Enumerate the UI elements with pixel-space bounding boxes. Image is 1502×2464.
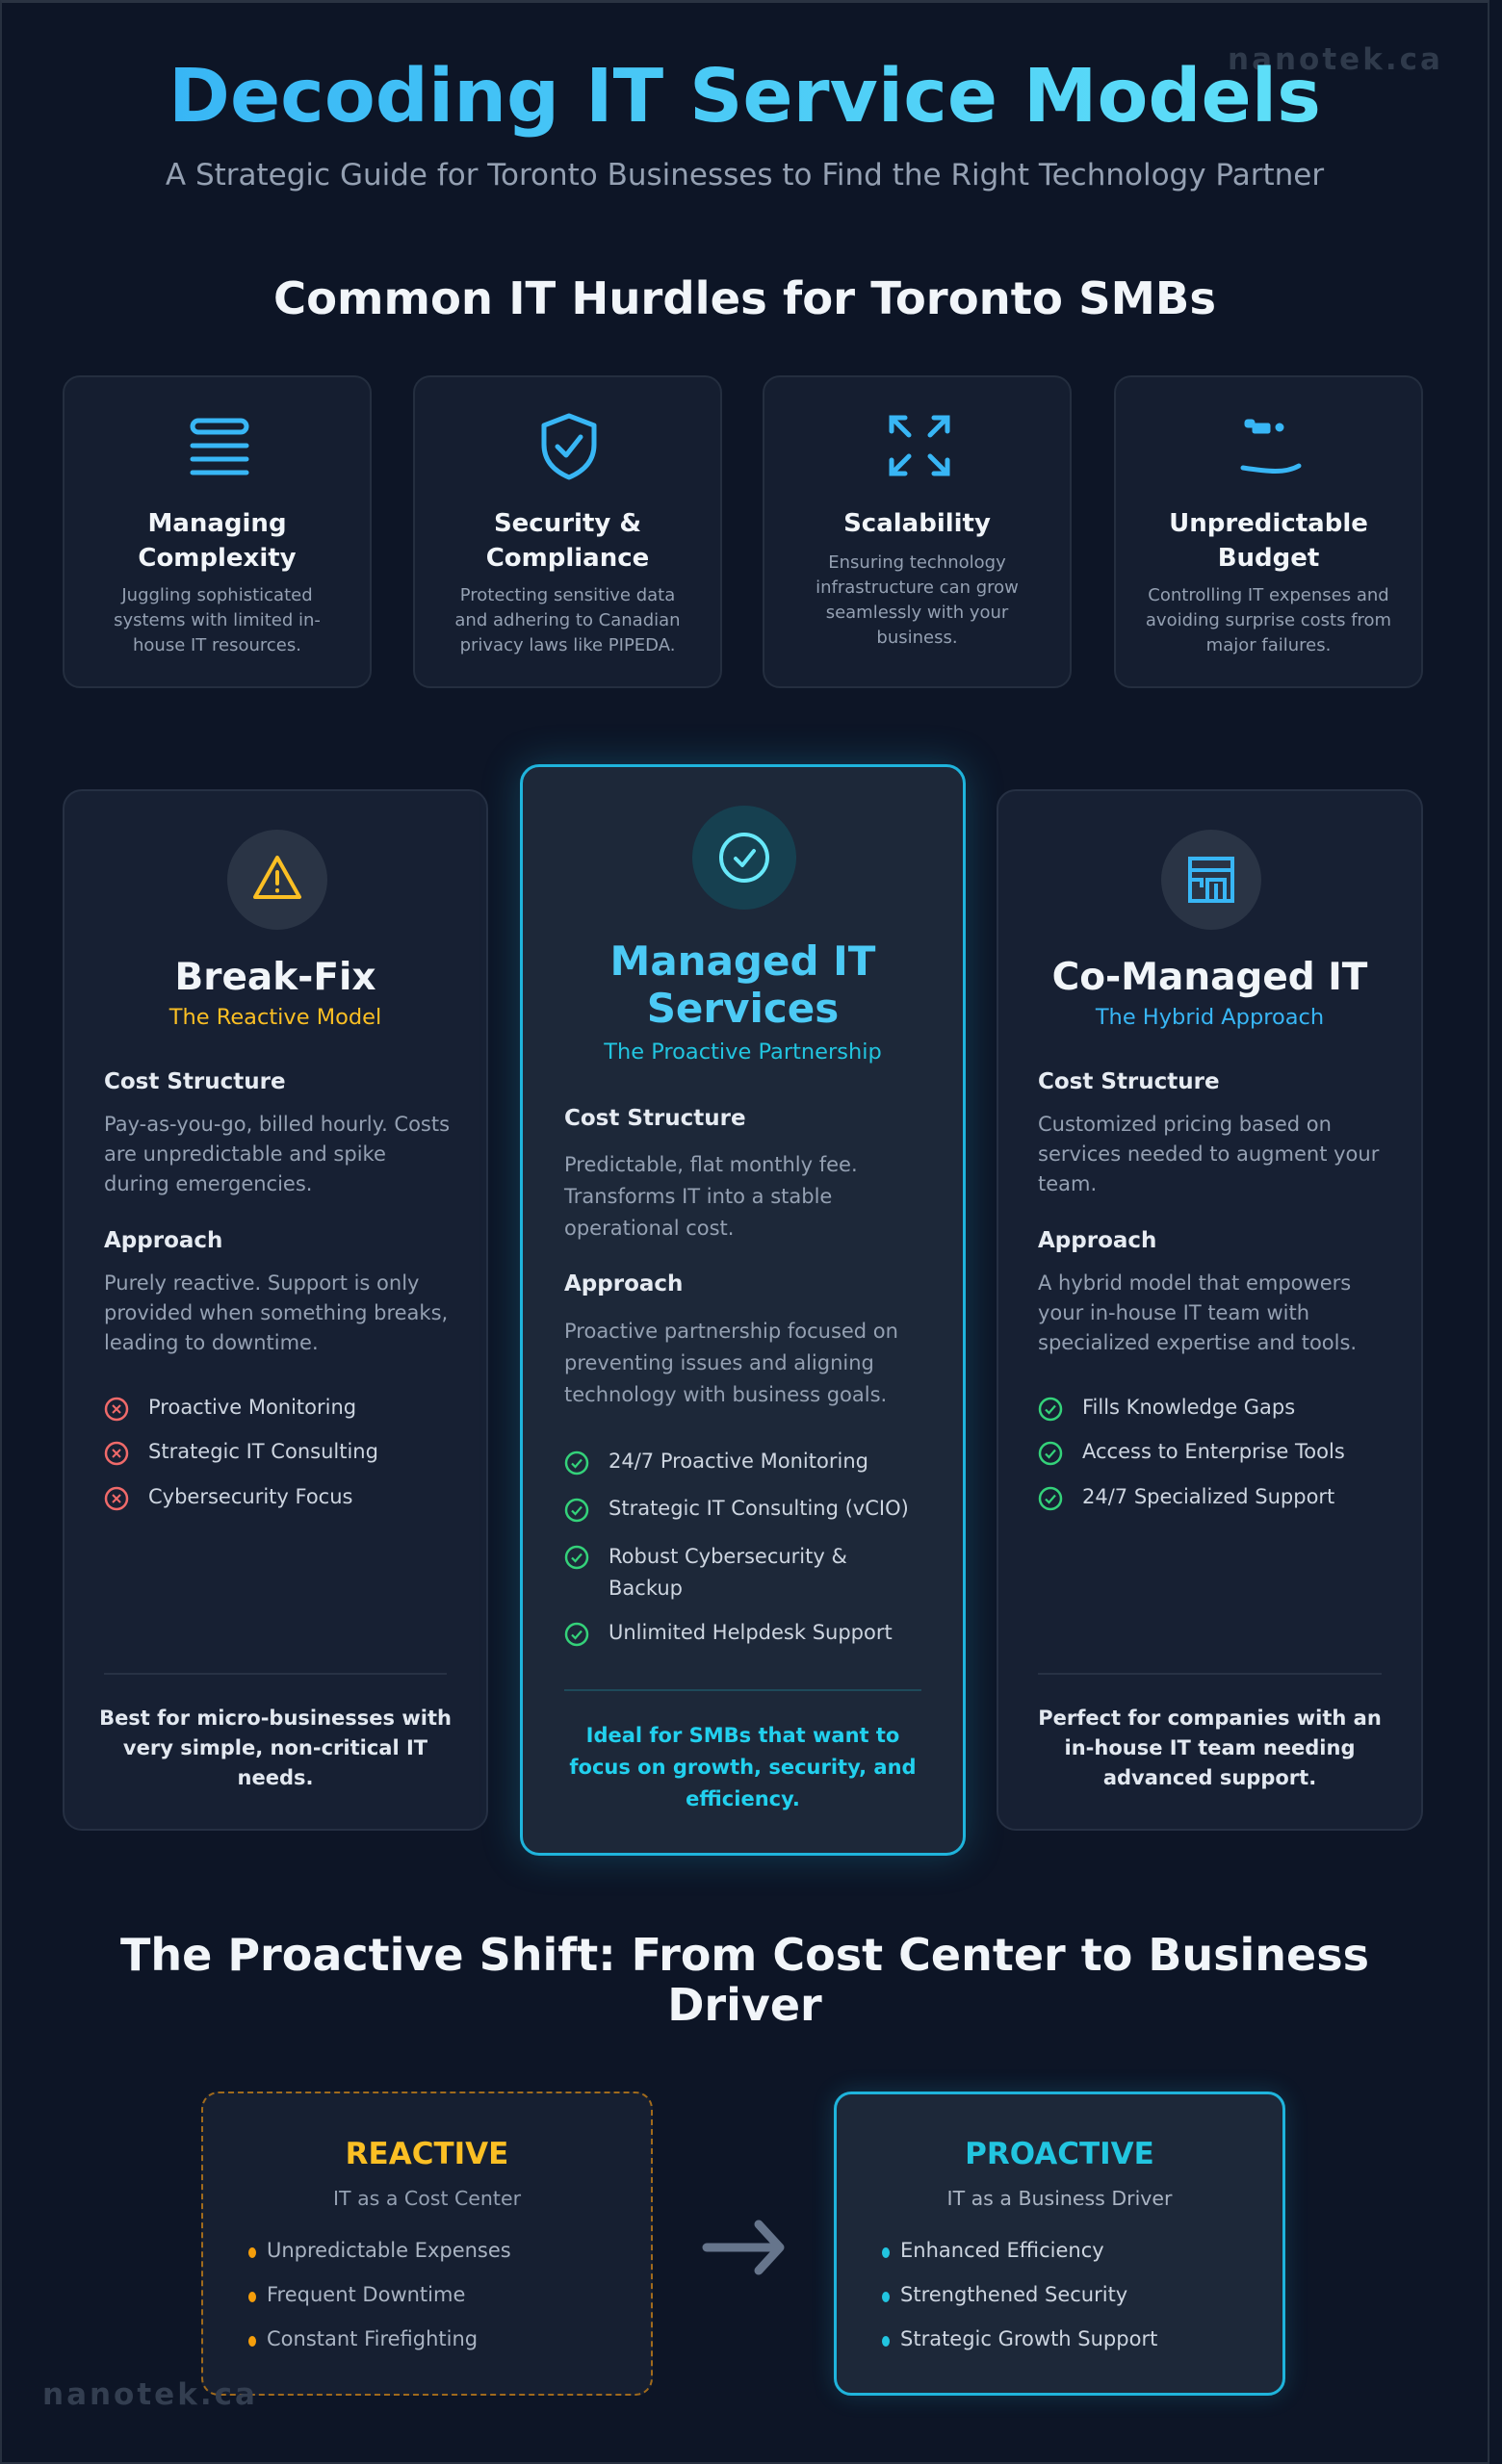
- panel: reactive: REACTIVE: [346, 2137, 508, 2171]
- panel: hurdle security: [413, 375, 722, 688]
- list: benefits: 24/7 Specialized Support: [1082, 1485, 1334, 1508]
- panel: hurdle security: Compliance: [486, 544, 649, 573]
- list: proactive traits: Strengthened Security: [900, 2283, 1127, 2306]
- icon: stack: [191, 418, 248, 475]
- list: included features: Strategic IT Consulting (vCIO): [609, 1497, 909, 1520]
- list: missing features: Proactive Monitoring: [148, 1396, 356, 1419]
- list: benefits: Access to Enterprise Tools: [1082, 1440, 1345, 1463]
- list: missing features: [104, 1396, 378, 1511]
- panel: co-managed: [997, 789, 1423, 1831]
- panel: co-managed: A hybrid model that empowers your in-house IT team with specialized expertise and tools.: [1038, 1271, 1357, 1354]
- watermark top: nanotek.ca: [1228, 42, 1443, 77]
- heading: Services: [647, 985, 839, 1032]
- panel: hurdle security: Security &: [494, 509, 641, 538]
- heading: Break-Fix: [174, 956, 376, 999]
- panel: hurdle managing complexity: Juggling sophisticated systems with limited in-house IT resources.: [114, 585, 321, 655]
- panel: hurdle security: Protecting sensitive data and adhering to Canadian privacy laws like PIPEDA.: [454, 585, 681, 655]
- panel: break-fix: The Reactive Model: [169, 1005, 381, 1030]
- icon: layout: [1161, 830, 1261, 930]
- list: included features: Unlimited Helpdesk Support: [609, 1621, 893, 1644]
- list: reactive traits: Constant Firefighting: [267, 2327, 478, 2350]
- panel: co-managed: Perfect for companies with an in-house IT team needing advanced support.: [1038, 1707, 1382, 1789]
- panel: hurdle scalability: [763, 375, 1072, 688]
- panel: hurdle scalability: Scalability: [843, 509, 991, 538]
- title: Decoding IT Service Models: [168, 54, 1321, 140]
- list: reactive traits: Unpredictable Expenses: [267, 2239, 511, 2262]
- arrow: [703, 2220, 784, 2275]
- list: included features: Robust Cybersecurity & Backup: [609, 1545, 847, 1600]
- panel: hurdle budget: Controlling IT expenses and avoiding surprise costs from major failures.: [1146, 585, 1391, 655]
- icon: shield: [541, 414, 597, 479]
- list: included features: [564, 1450, 909, 1646]
- panel: hurdle managing complexity: Managing: [147, 509, 287, 538]
- list: reactive traits: Frequent Downtime: [267, 2283, 465, 2306]
- panel: break-fix: [63, 789, 488, 1831]
- list: benefits: [1038, 1396, 1345, 1511]
- list: missing features: Strategic IT Consulting: [148, 1440, 378, 1463]
- panel: proactive: IT as a Business Driver: [947, 2187, 1172, 2210]
- panel: break-fix: Pay-as-you-go, billed hourly. Costs are unpredictable and spike during emergencies.: [104, 1113, 450, 1195]
- list: benefits: Fills Knowledge Gaps: [1082, 1396, 1295, 1419]
- panel: break-fix: Best for micro-businesses with very simple, non-critical IT needs.: [99, 1707, 452, 1789]
- panel: managed IT: [520, 764, 966, 1856]
- panel: co-managed: Approach: [1038, 1228, 1156, 1253]
- panel: break-fix: Approach: [104, 1228, 222, 1253]
- icon: expand arrows: [890, 416, 949, 475]
- heading: Managed IT: [610, 937, 875, 985]
- panel: hurdle budget: Budget: [1218, 544, 1319, 573]
- panel: managed IT: Ideal for SMBs that want to focus on growth, security, and efficiency.: [569, 1724, 917, 1810]
- list: reactive traits: [248, 2239, 511, 2350]
- list: missing features: Cybersecurity Focus: [148, 1485, 352, 1508]
- heading: [610, 937, 876, 1032]
- watermark bottom: nanotek.ca: [42, 2377, 258, 2412]
- list: proactive traits: Enhanced Efficiency: [900, 2239, 1104, 2262]
- panel: managed IT: The Proactive Partnership: [604, 1040, 882, 1065]
- icon: check circle: [692, 806, 796, 910]
- panel: hurdle budget: Unpredictable: [1169, 509, 1368, 538]
- panel: hurdle budget: [1114, 375, 1423, 688]
- panel: managed IT: Approach: [564, 1271, 683, 1296]
- panel: hurdle scalability: Ensuring technology infrastructure can grow seamlessly with your business.: [816, 552, 1019, 648]
- list: proactive traits: [882, 2239, 1157, 2350]
- heading: hurdles: Common IT Hurdles for Toronto SMBs: [273, 272, 1216, 324]
- list: proactive traits: Strategic Growth Support: [900, 2327, 1157, 2350]
- panel: proactive: [834, 2092, 1285, 2396]
- panel: break-fix: Purely reactive. Support is only provided when something breaks, leading to downtime.: [104, 1271, 448, 1354]
- panel: break-fix: Cost Structure: [104, 1069, 286, 1094]
- icon: budget: [1240, 420, 1302, 474]
- panel: reactive: IT as a Cost Center: [333, 2187, 521, 2210]
- panel: co-managed: The Hybrid Approach: [1096, 1005, 1324, 1030]
- panel: co-managed: Cost Structure: [1038, 1069, 1220, 1094]
- panel: co-managed: Customized pricing based on services needed to augment your team.: [1038, 1113, 1379, 1195]
- heading: Co-Managed IT: [1052, 956, 1367, 999]
- panel: managed IT: Cost Structure: [564, 1106, 746, 1131]
- subtitle: A Strategic Guide for Toronto Businesses to Find the Right Technology Partner: [166, 158, 1324, 192]
- panel: reactive: [201, 2092, 653, 2396]
- list: included features: 24/7 Proactive Monitoring: [609, 1450, 868, 1473]
- panel: hurdle managing complexity: Complexity: [138, 544, 297, 573]
- heading: proactive shift: The Proactive Shift: From Cost Center to Business Driver: [120, 1929, 1369, 2031]
- icon: warning: [227, 830, 327, 930]
- panel: managed IT: Proactive partnership focused on preventing issues and aligning technology with business goals.: [564, 1320, 898, 1406]
- panel: hurdle managing complexity: [63, 375, 372, 688]
- panel: managed IT: Predictable, flat monthly fee. Transforms IT into a stable operational cost.: [564, 1153, 858, 1240]
- panel: proactive: PROACTIVE: [965, 2137, 1154, 2171]
